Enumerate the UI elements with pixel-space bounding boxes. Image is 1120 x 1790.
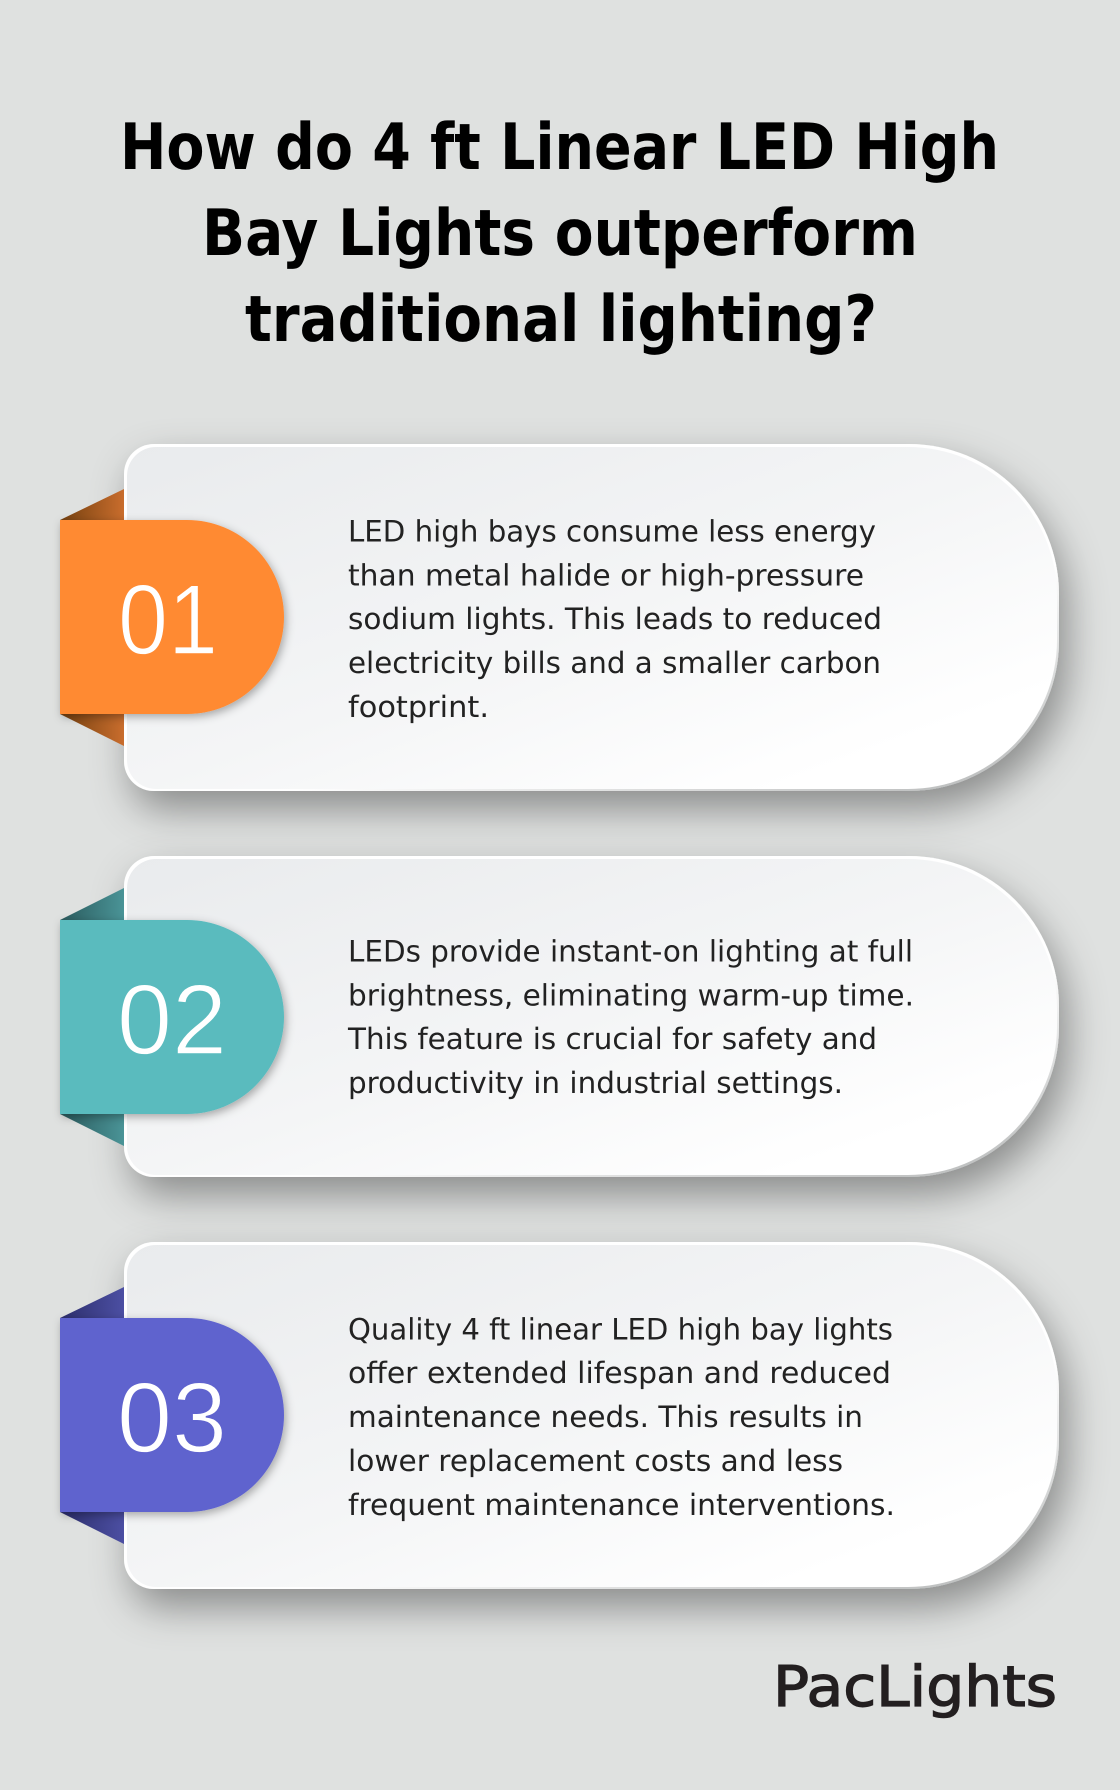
text block 01: LED high bays consume less energy bbox=[348, 514, 876, 548]
text block 01: sodium lights. This leads to reduced bbox=[348, 602, 882, 636]
text block 01: than metal halide or high-pressure bbox=[348, 558, 864, 592]
text block 01 bbox=[348, 514, 882, 724]
ribbon fold top 03 bbox=[60, 1287, 124, 1318]
text block 01: footprint. bbox=[348, 690, 489, 724]
card 02 surface bbox=[124, 856, 1059, 1177]
text block 03: maintenance needs. This results in bbox=[348, 1400, 863, 1434]
text block 03: offer extended lifespan and reduced bbox=[348, 1356, 891, 1390]
panel: step 01 energy savings bbox=[60, 444, 1059, 791]
text block 03 bbox=[348, 1312, 895, 1522]
text block 02: LEDs provide instant-on lighting at full bbox=[348, 934, 913, 968]
title: traditional lighting? bbox=[245, 283, 877, 357]
number badge 03 bbox=[60, 1318, 284, 1512]
text block 02: productivity in industrial settings. bbox=[348, 1066, 843, 1100]
text block 03: frequent maintenance interventions. bbox=[348, 1488, 895, 1522]
text block 03: Quality 4 ft linear LED high bay lights bbox=[348, 1312, 893, 1346]
ribbon fold top 01 bbox=[60, 489, 124, 520]
text block 02: This feature is crucial for safety and bbox=[347, 1022, 877, 1056]
text block 01: electricity bills and a smaller carbon bbox=[348, 646, 881, 680]
number badge 01 bbox=[60, 520, 284, 714]
number badge 02: 02 bbox=[117, 964, 227, 1076]
text block 02 bbox=[347, 934, 914, 1100]
title: Bay Lights outperform bbox=[202, 197, 918, 271]
number badge 02 bbox=[60, 920, 284, 1114]
title: How do 4 ft Linear LED High bbox=[120, 111, 999, 185]
card 03 surface bbox=[124, 1242, 1059, 1589]
number badge 01: 01 bbox=[118, 564, 218, 676]
ribbon fold top 02 bbox=[60, 888, 124, 920]
ribbon fold bottom 02 bbox=[60, 1114, 124, 1146]
title bbox=[120, 111, 999, 357]
number badge 03: 03 bbox=[117, 1362, 227, 1474]
panel: step 02 instant-on bbox=[60, 856, 1059, 1177]
text block 02: brightness, eliminating warm-up time. bbox=[348, 978, 914, 1012]
panel: step 03 lifespan bbox=[60, 1242, 1059, 1589]
logo: PacLights: PacLights bbox=[773, 1655, 1057, 1720]
ribbon fold bottom 01 bbox=[60, 714, 124, 746]
ribbon fold bottom 03 bbox=[60, 1512, 124, 1544]
text block 03: lower replacement costs and less bbox=[348, 1444, 843, 1478]
card 01 surface bbox=[124, 444, 1059, 791]
